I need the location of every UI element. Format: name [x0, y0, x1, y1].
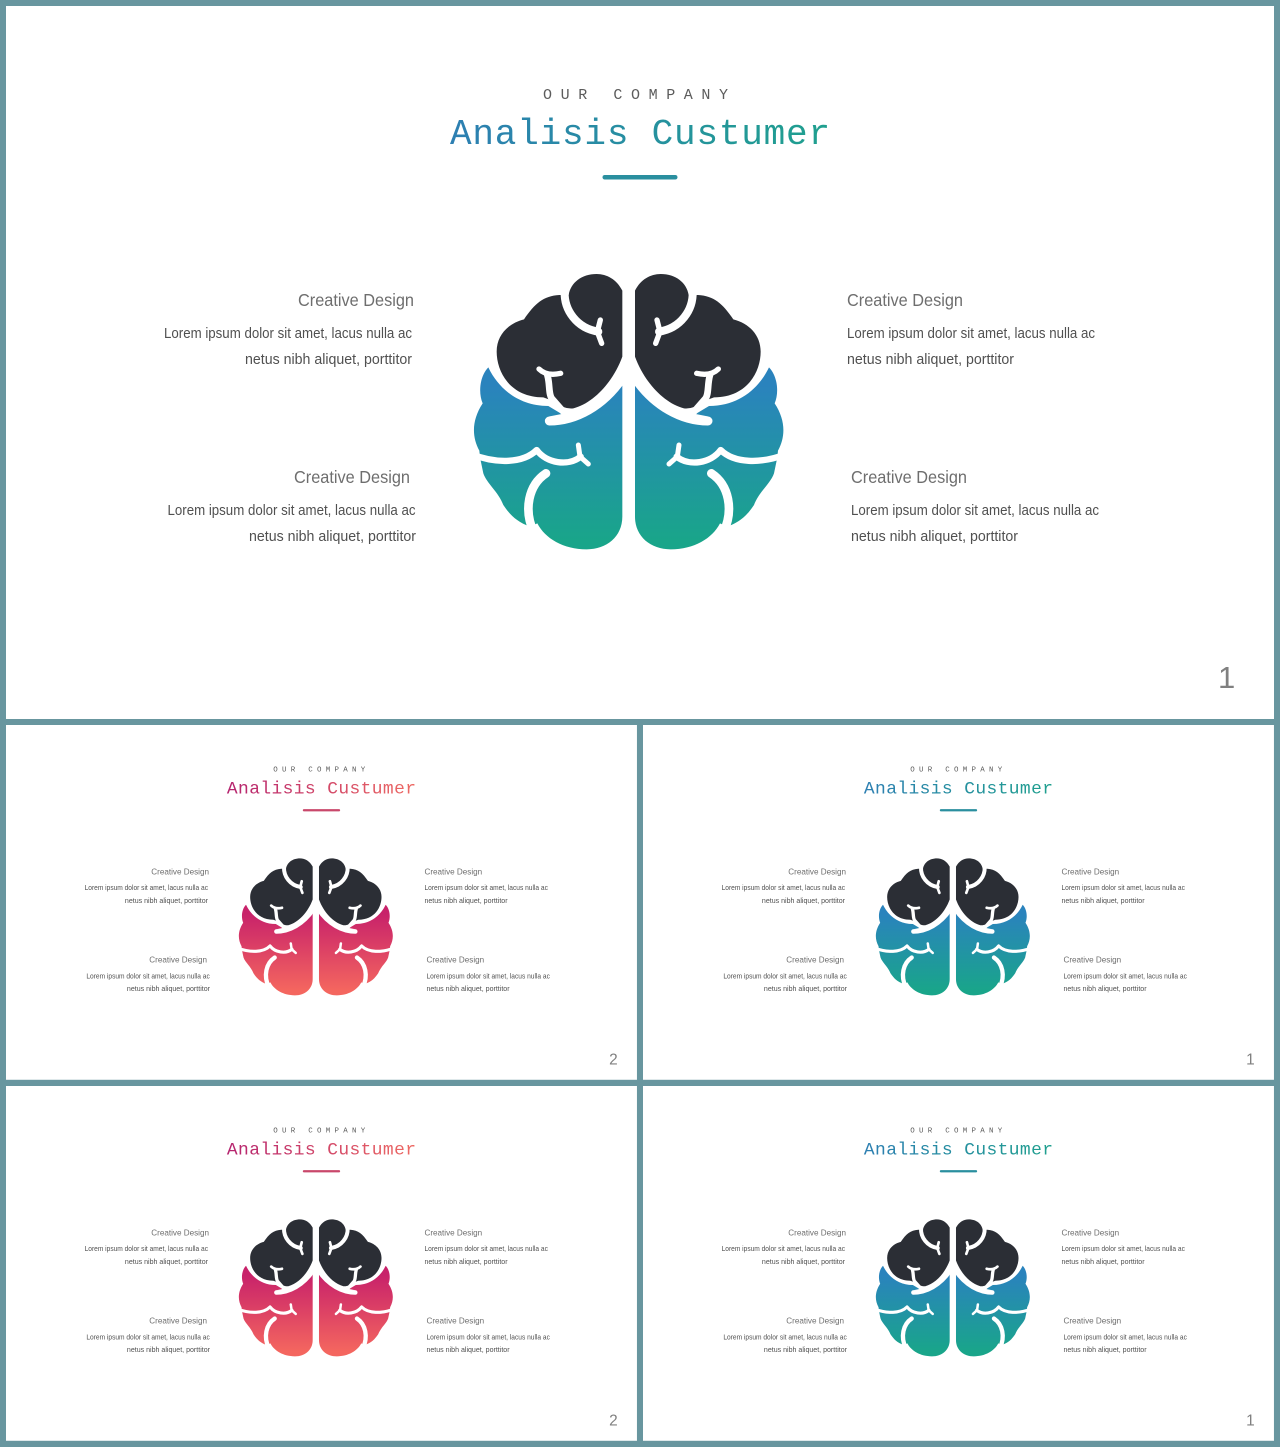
text blocks: Lorem ipsum dolor sit amet, lacus nulla ac [85, 883, 208, 892]
text block: bottom left: Lorem ipsum dolor sit amet, lacus nulla ac [168, 502, 416, 519]
page number: 2 [609, 1412, 618, 1429]
text blocks: netus nibh aliquet, porttitor [764, 1345, 847, 1354]
text block: bottom right: Lorem ipsum dolor sit amet, lacus nulla ac [851, 502, 1099, 519]
text blocks: Creative Design [788, 866, 846, 876]
text block: bottom left: netus nibh aliquet, porttitor [249, 528, 416, 545]
text block: top right: Creative Design [847, 290, 963, 310]
text block: bottom left: Creative Design [294, 467, 410, 487]
text blocks: Lorem ipsum dolor sit amet, lacus nulla ac [424, 883, 548, 892]
title: Analisis Custumer [864, 780, 1053, 800]
text blocks: netus nibh aliquet, porttitor [1061, 1257, 1145, 1266]
title: Analisis Custumer [864, 1141, 1053, 1161]
icon: brain [472, 274, 786, 549]
title: Analisis Custumer [450, 114, 831, 155]
text block: top right [847, 290, 1095, 368]
text blocks: Creative Design [151, 866, 209, 876]
text blocks: Creative Design [149, 1315, 207, 1325]
text blocks: netus nibh aliquet, porttitor [764, 984, 847, 993]
text block: top left: Creative Design [298, 290, 414, 310]
text block: top left [164, 290, 414, 368]
text blocks: Lorem ipsum dolor sit amet, lacus nulla ac [86, 1332, 210, 1341]
title underline [940, 809, 977, 811]
text blocks: Lorem ipsum dolor sit amet, lacus nulla ac [723, 971, 847, 980]
title: Analisis Custumer [227, 1141, 416, 1161]
text blocks: Lorem ipsum dolor sit amet, lacus nulla ac [86, 971, 210, 980]
text blocks: Creative Design [426, 1315, 484, 1325]
panel: thumbnail pink top [6, 725, 637, 1080]
text blocks: Creative Design [1061, 1227, 1119, 1237]
icon: brain [875, 1219, 1031, 1356]
text blocks [85, 1227, 550, 1354]
text blocks: netus nibh aliquet, porttitor [1063, 984, 1147, 993]
text blocks: Creative Design [786, 1315, 844, 1325]
panel: thumbnail teal top [643, 725, 1274, 1080]
text blocks: Creative Design [1061, 866, 1119, 876]
text blocks: Creative Design [786, 954, 844, 964]
text block: top left: Lorem ipsum dolor sit amet, lacus nulla ac [164, 325, 412, 342]
text blocks: Lorem ipsum dolor sit amet, lacus nulla ac [722, 1244, 845, 1253]
text blocks: netus nibh aliquet, porttitor [762, 1257, 846, 1266]
page number: 1 [1218, 660, 1235, 695]
text block: bottom left [168, 467, 416, 545]
text blocks: Creative Design [426, 954, 484, 964]
text blocks: Creative Design [424, 1227, 482, 1237]
text block: top right: netus nibh aliquet, porttitor [847, 351, 1014, 368]
text blocks: netus nibh aliquet, porttitor [424, 1257, 508, 1266]
text blocks: Lorem ipsum dolor sit amet, lacus nulla ac [1061, 1244, 1185, 1253]
text block: bottom right [851, 467, 1099, 545]
text block: top left: netus nibh aliquet, porttitor [245, 351, 412, 368]
icon: brain [238, 858, 394, 995]
eyebrow: our company: OUR COMPANY [543, 87, 737, 104]
text blocks: netus nibh aliquet, porttitor [127, 984, 210, 993]
text blocks: Lorem ipsum dolor sit amet, lacus nulla ac [424, 1244, 548, 1253]
page number: 2 [609, 1051, 618, 1068]
text blocks: Lorem ipsum dolor sit amet, lacus nulla ac [1061, 883, 1185, 892]
page number: 1 [1246, 1051, 1255, 1068]
text blocks: Lorem ipsum dolor sit amet, lacus nulla ac [426, 971, 550, 980]
text blocks [722, 866, 1187, 993]
text blocks: Lorem ipsum dolor sit amet, lacus nulla ac [85, 1244, 208, 1253]
text blocks: Lorem ipsum dolor sit amet, lacus nulla ac [722, 883, 845, 892]
text blocks: netus nibh aliquet, porttitor [762, 896, 846, 905]
text blocks: Lorem ipsum dolor sit amet, lacus nulla ac [426, 1332, 550, 1341]
text blocks [722, 1227, 1187, 1354]
panel: thumbnail teal bottom [643, 1086, 1274, 1441]
text blocks: Creative Design [1063, 1315, 1121, 1325]
icon: brain [238, 1219, 394, 1356]
text blocks: Creative Design [149, 954, 207, 964]
text blocks: Lorem ipsum dolor sit amet, lacus nulla ac [723, 1332, 847, 1341]
eyebrow: OUR COMPANY [273, 766, 369, 774]
title: Analisis Custumer [227, 780, 416, 800]
eyebrow: OUR COMPANY [273, 1127, 369, 1135]
text blocks: Creative Design [151, 1227, 209, 1237]
text block: top right: Lorem ipsum dolor sit amet, lacus nulla ac [847, 325, 1095, 342]
title underline [940, 1170, 977, 1172]
panel: thumbnail pink bottom [6, 1086, 637, 1441]
text block: bottom right: netus nibh aliquet, porttitor [851, 528, 1018, 545]
text blocks: Creative Design [1063, 954, 1121, 964]
icon: brain [875, 858, 1031, 995]
title underline [303, 809, 340, 811]
text blocks: Lorem ipsum dolor sit amet, lacus nulla ac [1063, 971, 1187, 980]
text blocks: netus nibh aliquet, porttitor [1061, 896, 1145, 905]
text blocks: netus nibh aliquet, porttitor [1063, 1345, 1147, 1354]
text blocks: netus nibh aliquet, porttitor [127, 1345, 210, 1354]
page number: 1 [1246, 1412, 1255, 1429]
text blocks: Creative Design [424, 866, 482, 876]
text blocks: netus nibh aliquet, porttitor [125, 1257, 209, 1266]
text blocks: netus nibh aliquet, porttitor [426, 984, 510, 993]
eyebrow: OUR COMPANY [910, 766, 1006, 774]
panel: main slide [6, 6, 1274, 719]
eyebrow: OUR COMPANY [910, 1127, 1006, 1135]
text block: bottom right: Creative Design [851, 467, 967, 487]
text blocks [85, 866, 550, 993]
title underline [303, 1170, 340, 1172]
text blocks: netus nibh aliquet, porttitor [125, 896, 209, 905]
title underline [602, 175, 678, 180]
text blocks: Lorem ipsum dolor sit amet, lacus nulla ac [1063, 1332, 1187, 1341]
text blocks: netus nibh aliquet, porttitor [426, 1345, 510, 1354]
text blocks: netus nibh aliquet, porttitor [424, 896, 508, 905]
text blocks: Creative Design [788, 1227, 846, 1237]
